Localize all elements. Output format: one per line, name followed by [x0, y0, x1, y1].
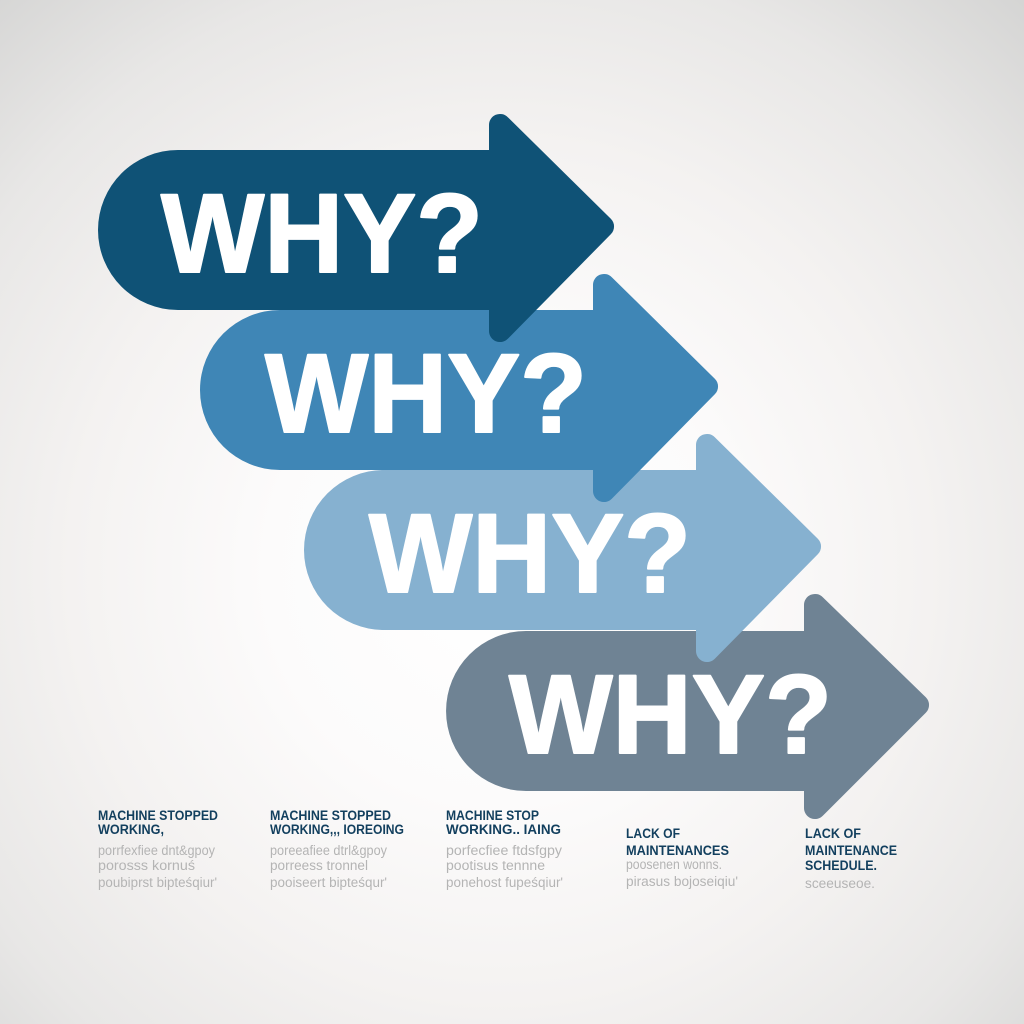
caption 5: SCHEDULE.	[805, 858, 877, 873]
caption 1: porrfexfiee dnt&gpoy	[98, 843, 215, 858]
caption 2: pooiseert bipteśqur'	[270, 875, 387, 890]
caption 2: porreess tronnel	[270, 858, 368, 873]
caption 2: MACHINE STOPPED	[270, 808, 391, 823]
arrow 4: slate grey WHY: WHY?	[509, 652, 832, 777]
caption 3: pootisus tennne	[446, 858, 545, 873]
arrow 2: mid blue WHY	[200, 274, 718, 502]
caption 5	[805, 826, 897, 891]
arrow 4: slate grey WHY	[446, 594, 929, 819]
caption 1: poubiprst bipteśqiur'	[98, 875, 217, 890]
caption 4: pirasus bojoseiqiu'	[626, 874, 738, 889]
caption 4	[626, 826, 738, 889]
arrow 1: dark blue WHY	[98, 114, 614, 342]
caption 3: ponehost fupeśqiur'	[446, 875, 563, 890]
caption 2: WORKING,,, IOREOING	[270, 822, 404, 837]
caption 2	[270, 808, 404, 890]
caption 3	[446, 808, 563, 890]
caption 3: porfecfiee ftdsfgpy	[446, 843, 562, 858]
caption 1: WORKING,	[98, 822, 164, 837]
caption 4: LACK OF	[626, 826, 680, 841]
caption 1: MACHINE STOPPED	[98, 808, 218, 823]
caption 1: porosss kornuś	[98, 858, 195, 873]
caption 5: LACK OF	[805, 826, 861, 841]
arrow 3: light blue WHY: WHY?	[369, 491, 691, 616]
caption 4: poosenen wonns.	[626, 857, 722, 872]
caption 5: MAINTENANCE	[805, 843, 897, 858]
caption 5: sceeuseoe.	[805, 876, 875, 891]
caption 2: poreeafiee dtrl&gpoy	[270, 843, 387, 858]
arrow 3: light blue WHY	[304, 434, 821, 662]
caption 1	[98, 808, 218, 890]
caption 4: MAINTENANCES	[626, 843, 729, 858]
caption 3: WORKING.. IAING	[446, 822, 561, 837]
caption 3: MACHINE STOP	[446, 808, 539, 823]
arrow 2: mid blue WHY: WHY?	[265, 331, 587, 456]
arrow 1: dark blue WHY: WHY?	[161, 171, 483, 296]
